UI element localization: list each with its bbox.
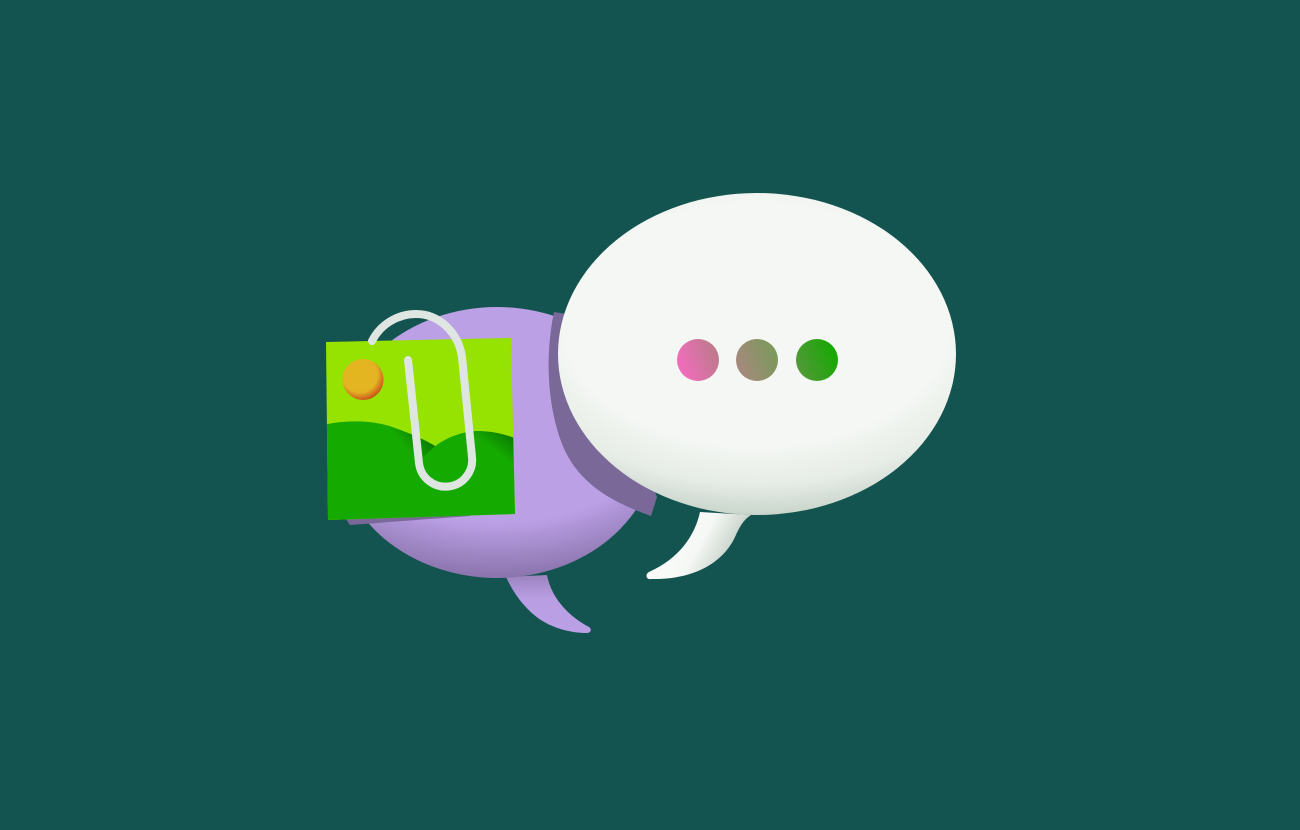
image attachment shadow <box>346 514 471 525</box>
image sky <box>326 338 515 520</box>
illustration: chat bubbles with image attachment <box>326 193 956 633</box>
image attachment card <box>326 338 515 520</box>
image sun <box>342 359 384 400</box>
purple speech bubble <box>337 307 657 633</box>
purple bubble tail <box>506 575 591 633</box>
bubble drop shadow <box>549 312 657 516</box>
typing indicator dots <box>677 339 838 381</box>
white speech bubble <box>558 193 956 579</box>
image hills <box>326 421 515 520</box>
white bubble body <box>558 193 956 515</box>
purple bubble body <box>337 307 657 578</box>
white bubble tail <box>647 512 751 579</box>
pink dot <box>677 339 719 381</box>
green dot <box>796 339 838 381</box>
mixed dot <box>736 339 778 381</box>
paperclip <box>372 314 472 487</box>
